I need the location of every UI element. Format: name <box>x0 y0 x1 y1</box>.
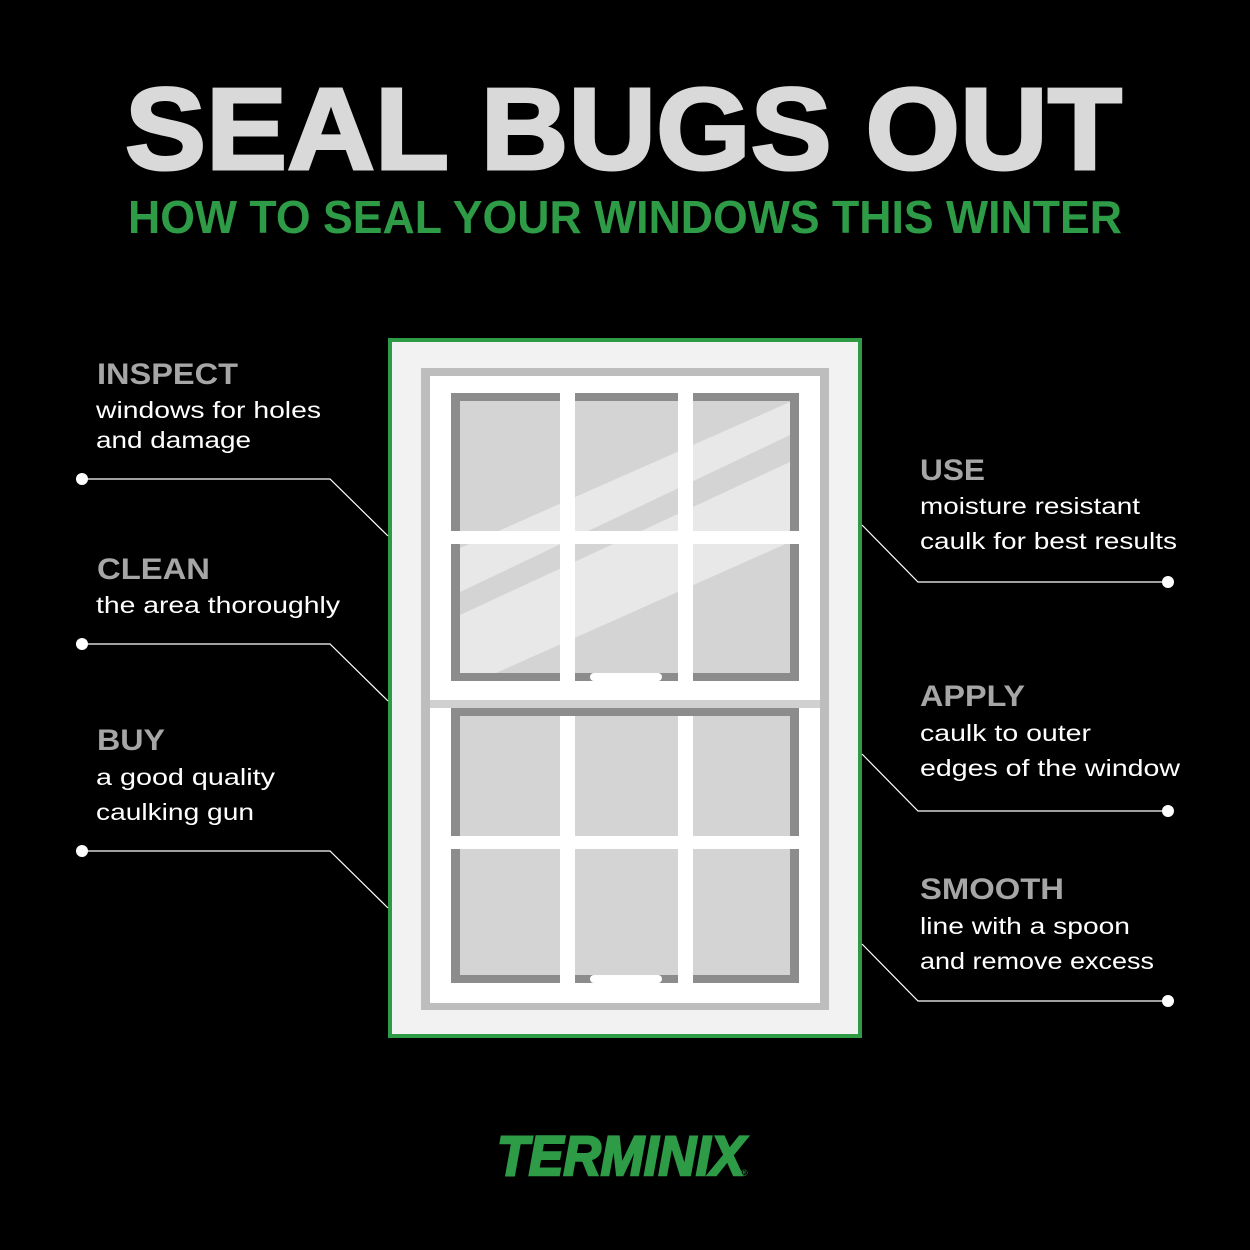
step: apply: APPLY <box>920 680 1025 713</box>
window illustration <box>390 340 860 1036</box>
step: use: caulk for best results <box>920 528 1177 554</box>
step: apply: caulk to outer <box>920 720 1091 746</box>
step: smooth: and remove excess <box>920 948 1154 974</box>
step: buy <box>76 724 388 908</box>
step: buy: BUY <box>97 724 165 757</box>
step: inspect: INSPECT <box>97 358 238 391</box>
step: inspect <box>76 358 388 536</box>
step: use <box>862 454 1177 588</box>
logo: terminix: TERMINIX <box>497 1124 748 1187</box>
step: inspect: windows for holes <box>95 397 321 423</box>
step: buy: a good quality <box>96 764 276 790</box>
step: smooth: SMOOTH <box>920 873 1064 906</box>
logo: terminix: ® <box>741 1168 748 1178</box>
step: use: moisture resistant <box>920 493 1141 519</box>
lower sash <box>451 708 799 983</box>
upper sash <box>451 393 799 681</box>
step: clean: CLEAN <box>97 553 210 586</box>
step: buy: caulking gun <box>96 799 254 825</box>
step: apply <box>862 680 1180 817</box>
step: smooth <box>862 873 1174 1007</box>
step: clean: the area thoroughly <box>96 592 341 618</box>
subtitle: HOW TO SEAL YOUR WINDOWS THIS WINTER <box>128 191 1122 243</box>
step: inspect: and damage <box>96 427 251 453</box>
step: use: USE <box>920 454 985 487</box>
step: apply: edges of the window <box>920 755 1180 781</box>
title: SEAL BUGS OUT <box>125 64 1122 194</box>
step: smooth: line with a spoon <box>920 913 1130 939</box>
step: clean <box>76 553 388 701</box>
